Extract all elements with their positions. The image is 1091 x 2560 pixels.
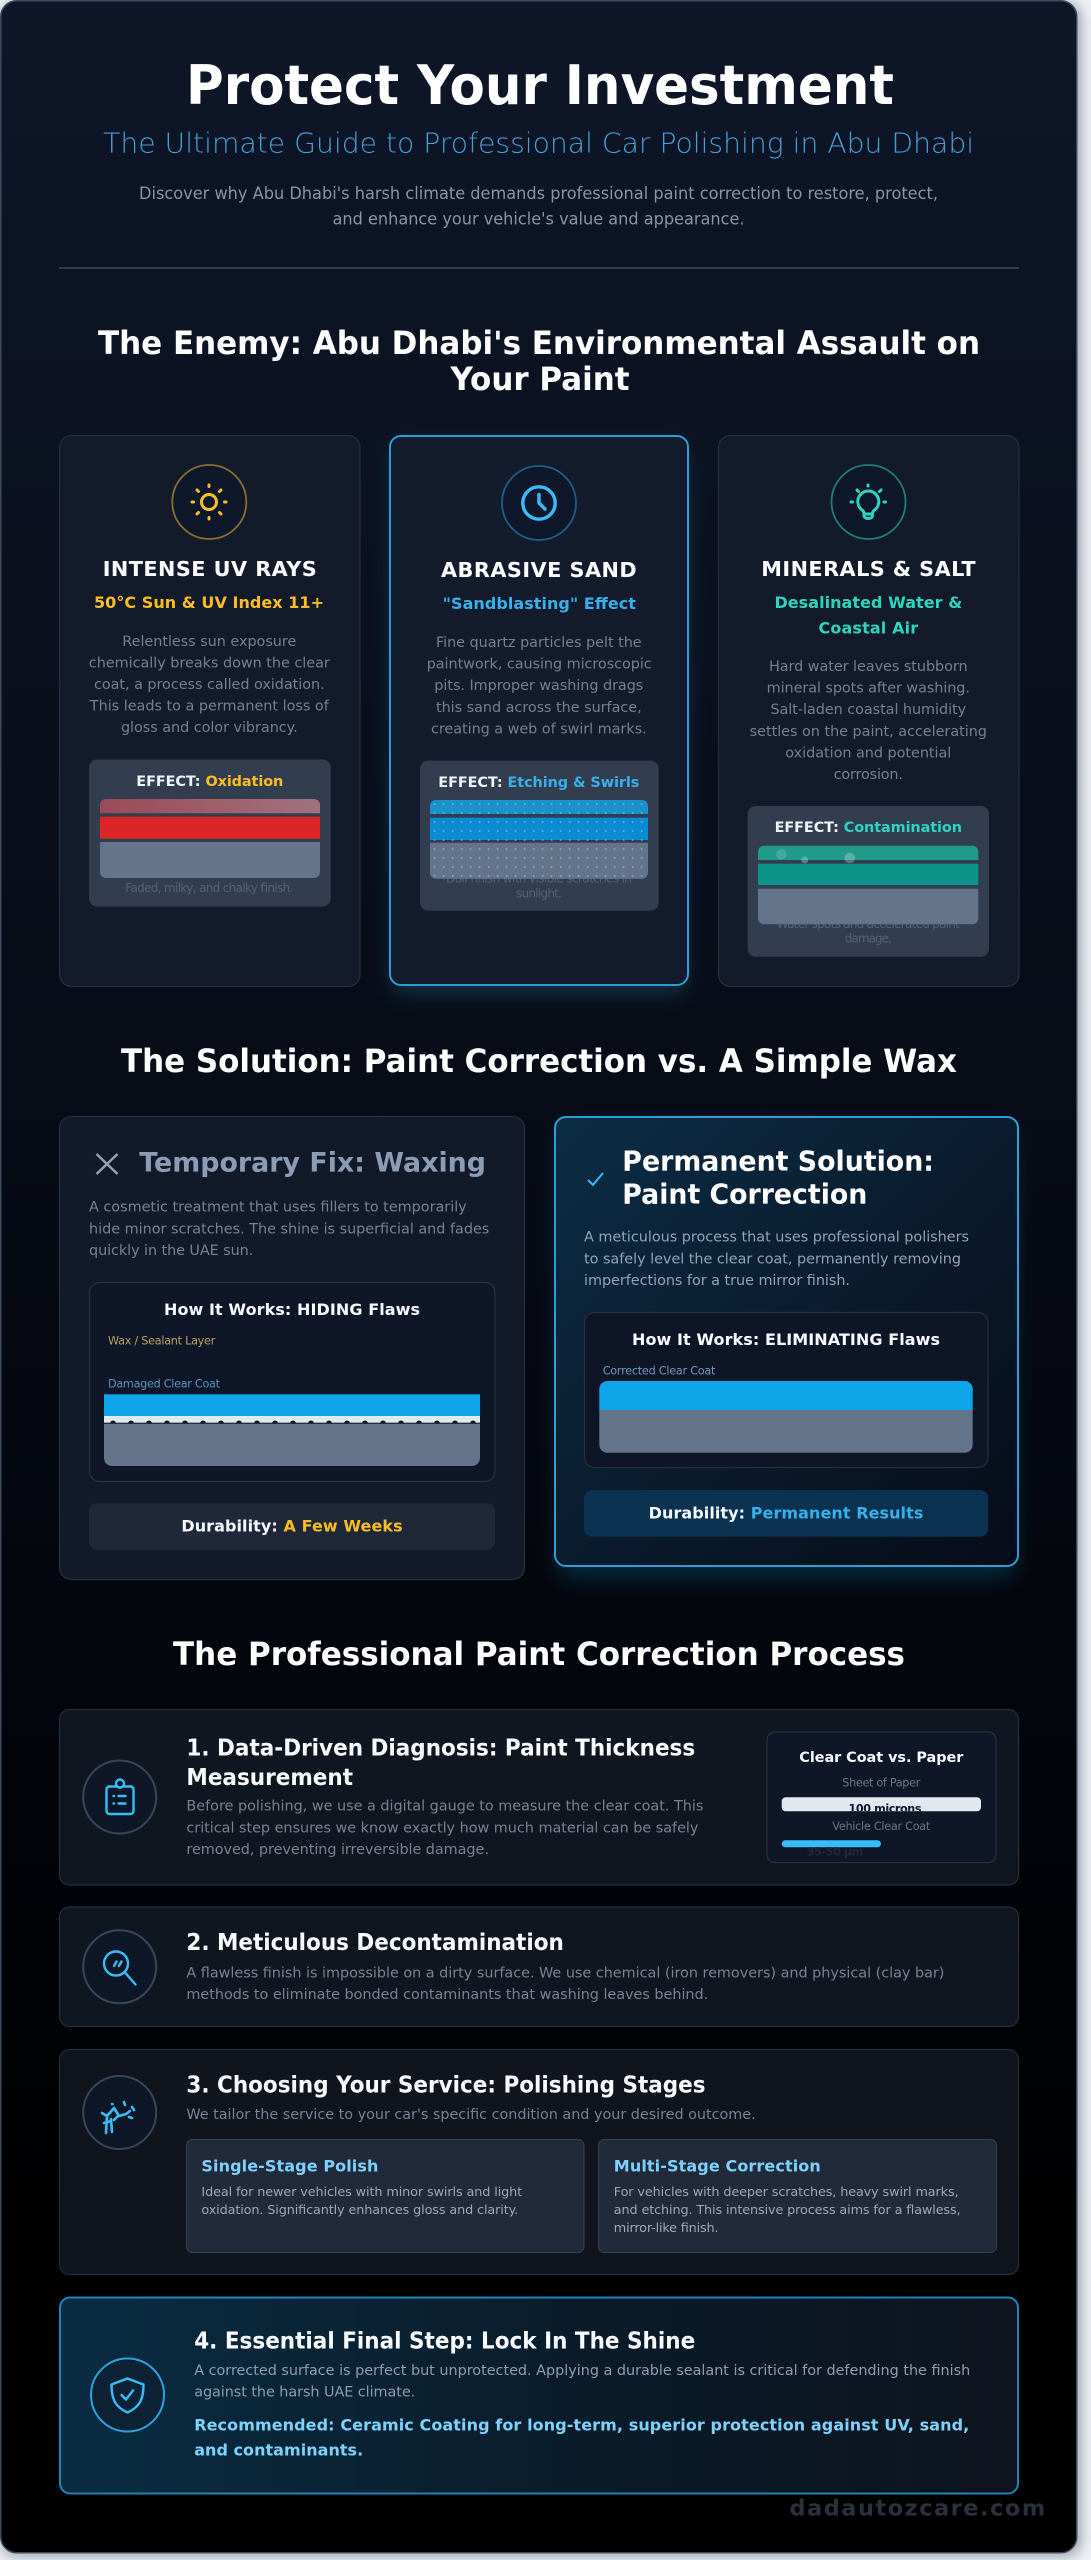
icon: sun [172,465,246,539]
card description: mineral spots after washing. [767,681,970,697]
card description: creating a web of swirl marks. [431,721,647,737]
option: single-stage polish [186,2140,584,2252]
recommendation [194,2416,969,2460]
card title: MINERALS & SALT [761,557,976,581]
durability: a few weeks: Durability: A Few Weeks [181,1517,403,1536]
card title: INTENSE UV RAYS [103,557,317,581]
panel: abrasive sand [390,436,688,994]
card subtitle: 50°C Sun & UV Index 11+ [94,593,324,612]
title: Protect Your Investment [186,54,894,117]
card subtitle: Desalinated Water & [774,593,962,612]
effect box: etching and swirls: Dull finish with visible scratches in [446,872,632,886]
recommendation: Recommended: Ceramic Coating for long-term, superior protection against UV, sand, [194,2416,969,2435]
option: multi-stage correction: and etching. This intensive process aims for a flawless, [614,2203,961,2218]
intro text [139,183,938,228]
comparison chart: clear coat vs paper: Vehicle Clear Coat [832,1820,931,1833]
effect box: oxidation: Faded, milky, and chalky finish. [125,881,293,895]
damaged paint diagram [104,1394,480,1466]
effect box: contamination [748,806,989,957]
effect box: oxidation: EFFECT: Oxidation [136,774,283,790]
step description [186,1965,944,2003]
how it works box: eliminating flaws: How It Works: ELIMINATING Flaws [632,1330,940,1349]
icon: shield [91,2358,164,2432]
icon: light bulb [832,465,906,539]
heading: the enemy: Your Paint [450,360,630,398]
panel: minerals and salt [718,436,1019,986]
option: single-stage polish: Single-Stage Polish [201,2157,378,2176]
effect box: contamination: damage. [845,932,892,946]
step title: 4. Essential Final Step: Lock In The Shine [194,2328,695,2354]
corrected paint diagram [599,1381,973,1453]
step description: A corrected surface is perfect but unprotected. Applying a durable sealant is critical for defending the finish [194,2363,970,2379]
header [103,54,974,228]
comparison chart: clear coat vs paper: Clear Coat vs. Paper [799,1750,964,1766]
heading: the enemy: The Enemy: Abu Dhabi's Environmental Assault on [98,324,980,362]
step title: 1. Data-Driven Diagnosis: Paint Thickness [186,1736,695,1762]
option: multi-stage correction: Multi-Stage Correction [614,2157,821,2176]
icon: cross [96,1154,118,1174]
option: multi-stage correction: mirror-like finish. [614,2221,718,2236]
step description [194,2363,970,2401]
step title: 3. Choosing Your Service: Polishing Stages [186,2072,706,2098]
card subtitle: "Sandblasting" Effect [443,594,636,613]
card description [427,635,652,737]
card subtitle: Coastal Air [818,618,918,637]
card description: gloss and color vibrancy. [121,720,298,736]
option: multi-stage correction [598,2140,996,2252]
effect box: oxidation [89,760,331,906]
icon: magnifier [83,1930,156,2003]
panel heading [622,1145,934,1210]
bar: clear coat 35-50 microns: 35-50 μm [807,1846,863,1859]
step 4: lock in the shine [60,2298,1018,2494]
durability: permanent results [584,1490,988,1537]
bar: clear coat 35-50 microns [782,1840,881,1859]
effect box: etching and swirls: sunlight. [516,886,562,900]
card description: pits. Improper washing drags [434,678,643,694]
step description: critical step ensures we know exactly how much material can be safely [186,1820,699,1836]
panel: temporary fix waxing [60,1116,524,1580]
card description [750,659,987,783]
card description [89,634,330,736]
step description: removed, preventing irreversible damage. [186,1842,489,1858]
option: multi-stage correction: For vehicles with deeper scratches, heavy swirl marks, [614,2185,959,2200]
option: single-stage polish: oxidation. Significantly enhances gloss and clarity. [201,2203,518,2218]
effect box: etching and swirls [420,761,659,911]
panel heading: Temporary Fix: Waxing [139,1148,486,1179]
effect box: contamination: EFFECT: Contamination [775,820,962,836]
heading: the solution: The Solution: Paint Correction vs. A Simple Wax [121,1042,957,1080]
step 2: decontamination [60,1907,1018,2026]
card description: settles on the paint, accelerating [750,724,987,740]
icon: check mark [588,1173,603,1185]
step description: We tailor the service to your car's specific condition and your desired outcome. [186,2107,756,2123]
label: corrected clear coat: Corrected Clear Coat [603,1364,716,1377]
heading: the enemy [98,324,980,398]
intro text: Discover why Abu Dhabi's harsh climate demands professional paint correction to restore, protect, [139,183,938,203]
intro text: and enhance your vehicle's value and appearance. [332,208,744,228]
panel description [584,1230,969,1289]
card description: oxidation and potential [785,745,951,761]
step description: A flawless finish is impossible on a dirty surface. We use chemical (iron removers) and physical (clay bar) [186,1965,944,1981]
step description: methods to eliminate bonded contaminants that washing leaves behind. [186,1987,708,2003]
effect box: etching and swirls: EFFECT: Etching & Swirls [438,775,639,791]
card description: This leads to a permanent loss of [89,699,330,715]
step 3: polishing stages [60,2050,1018,2274]
comparison chart: clear coat vs paper [767,1732,996,1862]
step description: Before polishing, we use a digital gauge to measure the clear coat. This [186,1799,703,1815]
card description: this sand across the surface, [436,700,642,716]
panel description [89,1200,489,1259]
panel description: to safely level the clear coat, permanently removing [584,1251,961,1267]
heading: the process: The Professional Paint Correction Process [173,1635,905,1673]
icon: clock [502,466,576,540]
card title: ABRASIVE SAND [441,558,637,582]
card description: Relentless sun exposure [122,634,296,650]
step 1: diagnosis [60,1710,1018,1885]
paint layers diagram [430,800,648,879]
icon: polisher [83,2076,156,2149]
watermark: dadautozcare.com [790,2496,1045,2522]
paint layers diagram [758,846,978,924]
how it works box: hiding flaws [90,1282,495,1482]
paint layers diagram [100,799,320,878]
label: damaged clear coat: Damaged Clear Coat [108,1378,221,1391]
panel description: A cosmetic treatment that uses fillers to temporarily [89,1200,467,1216]
card description: Fine quartz particles pelt the [436,635,642,651]
panel heading: Permanent Solution: [622,1145,934,1178]
how it works box: eliminating flaws [584,1312,988,1468]
durability: a few weeks [89,1503,495,1550]
card subtitle [774,593,962,637]
step title [186,1736,695,1791]
recommendation: and contaminants. [194,2441,363,2460]
panel description: hide minor scratches. The shine is superficial and fades [89,1221,489,1237]
panel: intense UV rays [60,436,360,986]
subtitle: The Ultimate Guide to Professional Car Polishing in Abu Dhabi [103,126,974,159]
bar: paper 100 microns: 100 microns [848,1802,922,1816]
panel: permanent solution paint correction [555,1117,1018,1578]
step description [186,1799,703,1858]
option: single-stage polish: Ideal for newer vehicles with minor swirls and light [201,2185,522,2200]
panel description: imperfections for a true mirror finish. [584,1273,850,1289]
durability: permanent results: Durability: Permanent Results [649,1503,923,1522]
card description: Salt-laden coastal humidity [770,702,967,718]
step title: 2. Meticulous Decontamination [186,1930,564,1956]
card description: Hard water leaves stubborn [769,659,968,675]
comparison chart: clear coat vs paper: Sheet of Paper [842,1777,921,1790]
card description: coat, a process called oxidation. [94,677,325,693]
label: wax layer: Wax / Sealant Layer [108,1334,216,1347]
bar: paper 100 microns [782,1797,981,1812]
card description: chemically breaks down the clear [89,655,330,671]
icon: clipboard [83,1760,156,1834]
how it works box: hiding flaws: How It Works: HIDING Flaws [164,1300,420,1319]
panel description: A meticulous process that uses professional polishers [584,1230,969,1246]
step description: against the harsh UAE climate. [194,2385,415,2401]
card description: corrosion. [834,767,903,783]
card description: paintwork, causing microscopic [427,657,652,673]
panel description: quickly in the UAE sun. [89,1243,253,1259]
effect box: contamination: Water spots and accelerated paint [777,917,960,931]
panel heading: Paint Correction [622,1177,867,1210]
step title: Measurement [186,1765,353,1791]
